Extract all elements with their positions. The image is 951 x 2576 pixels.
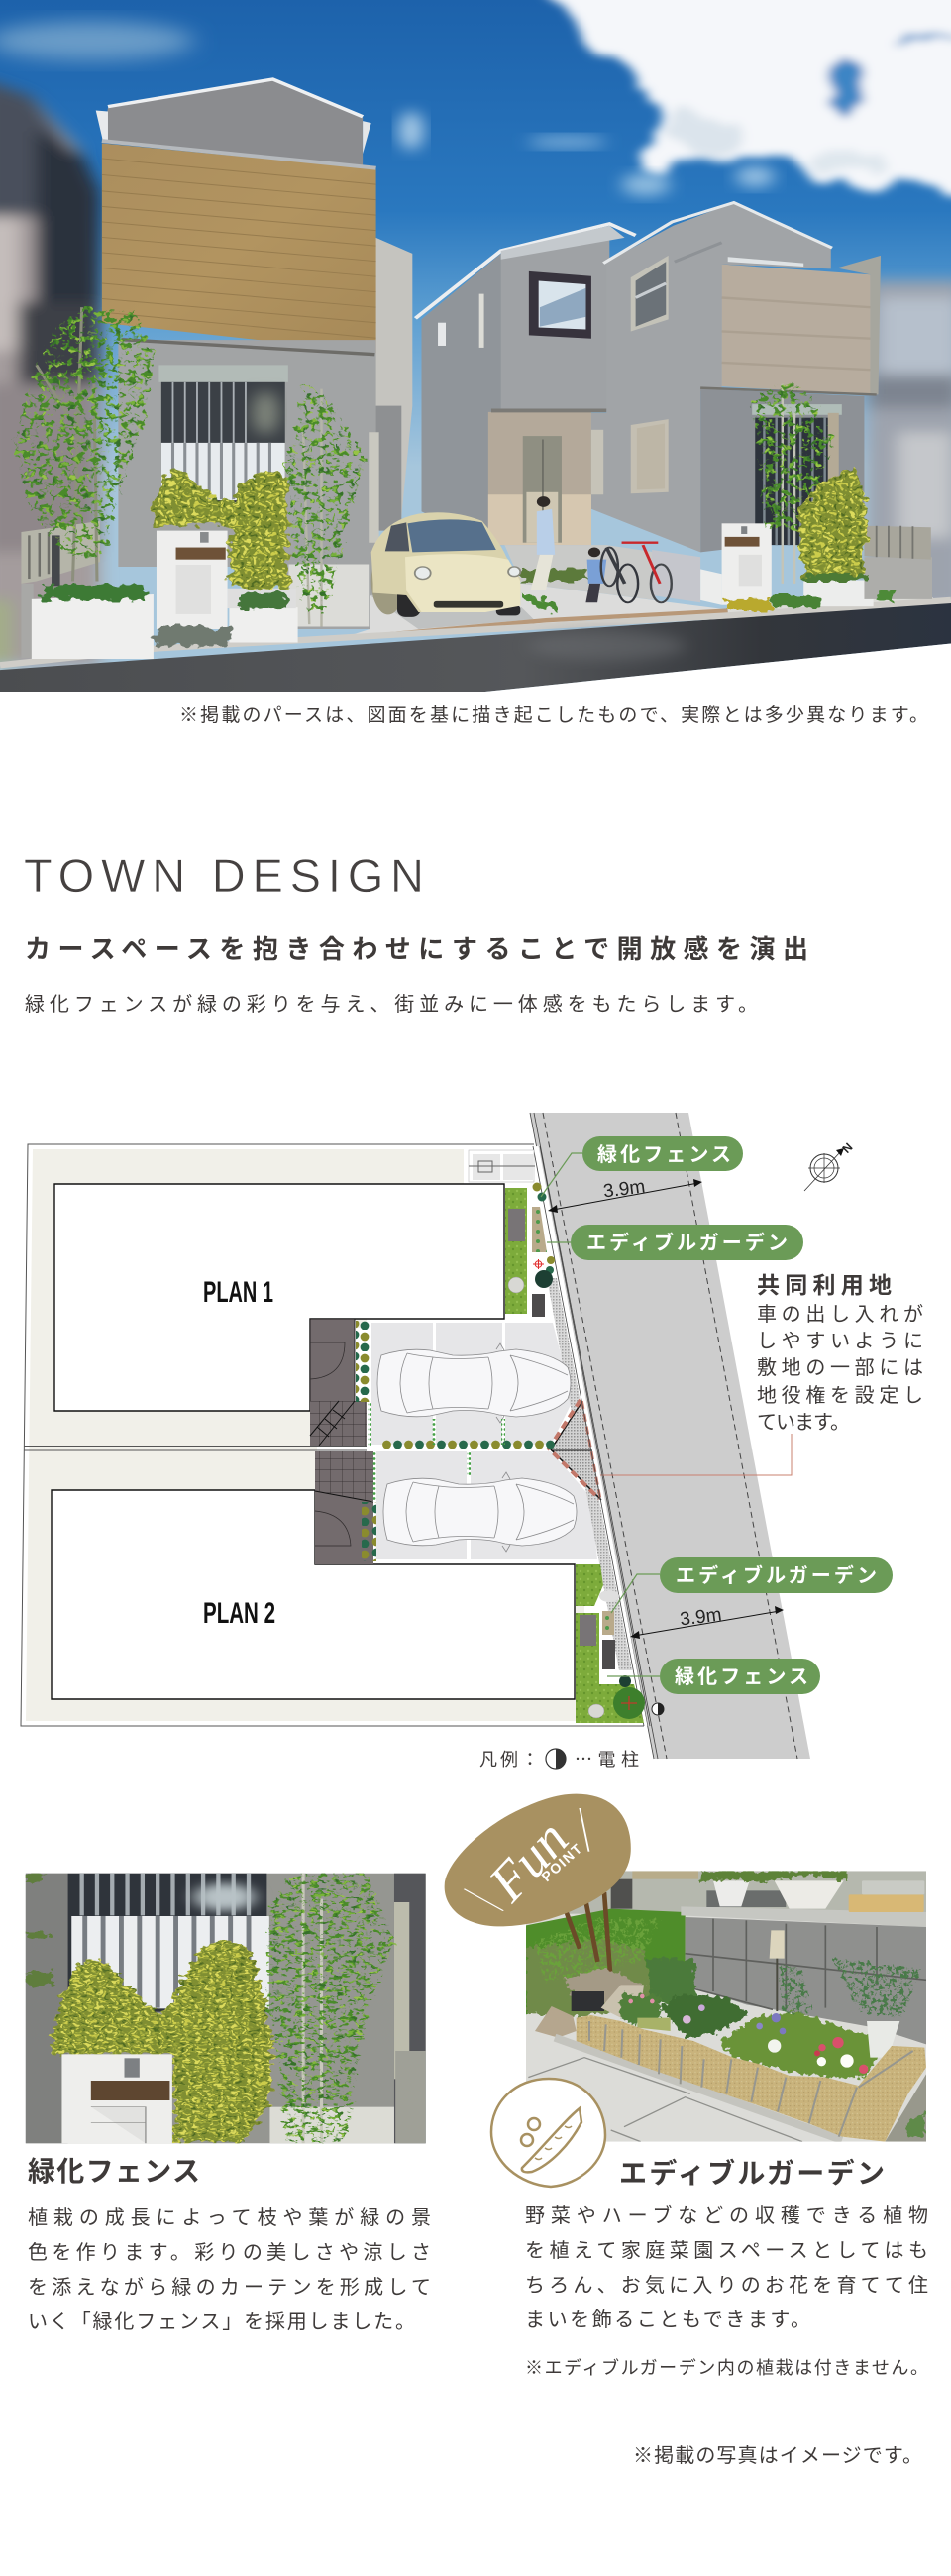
shared land note: ています。 xyxy=(757,1412,850,1434)
shared land note xyxy=(757,1272,923,1434)
leader lines xyxy=(541,1153,660,1676)
parking panels xyxy=(371,1323,597,1559)
right house xyxy=(415,203,881,602)
sub heading: 緑化フェンスが緑の彩りを与え、街並みに一体感をもたらします。 xyxy=(25,993,758,1016)
road xyxy=(530,1113,810,1759)
Fun POINT lettering: Fun xyxy=(476,1809,580,1913)
site plan xyxy=(21,1113,923,1770)
heading: edible garden: エディブルガーデン xyxy=(619,2157,885,2189)
icon: pea pod xyxy=(491,2079,605,2187)
clouds xyxy=(0,0,951,206)
Fun POINT lettering: POINT xyxy=(538,1840,585,1884)
sky xyxy=(0,0,951,753)
shared land note: 共同利用地 xyxy=(757,1272,892,1298)
text block: edible garden: を植えて家庭菜園スペースとしてはも xyxy=(525,2239,928,2262)
title: TOWN DESIGN: TOWN DESIGN xyxy=(24,849,424,902)
utility pole marker xyxy=(652,1703,664,1715)
shared land note: 車の出し入れが xyxy=(757,1303,923,1326)
PLAN 1 footprint: PLAN 1 xyxy=(203,1276,273,1309)
bicycle parking xyxy=(469,1150,535,1182)
text block: edible garden: 野菜やハーブなどの収穫できる植物 xyxy=(525,2203,928,2227)
entrance plan 1 xyxy=(310,1319,371,1446)
text block: green fence: 植栽の成長によって枝や葉が緑の景 xyxy=(28,2206,431,2229)
pill: edible garden upper: エディブルガーデン xyxy=(586,1231,788,1254)
lot divider xyxy=(24,1447,367,1450)
shared land note: しやすいように xyxy=(757,1331,923,1352)
shared land note: 敷地の一部には xyxy=(757,1356,923,1379)
text block: edible garden xyxy=(525,2203,928,2331)
PLAN 1 footprint xyxy=(54,1184,504,1411)
road xyxy=(0,600,951,692)
dimension lower 3.9m xyxy=(630,1604,784,1639)
front fence, planters and gate posts xyxy=(21,521,932,659)
blurred neighbouring house left xyxy=(0,79,100,665)
legend: 凡例： xyxy=(479,1750,539,1770)
ground and driveway xyxy=(340,584,933,639)
entrance plan 2 xyxy=(315,1451,376,1564)
blurred neighbouring house right xyxy=(868,281,951,607)
compass: N xyxy=(840,1140,856,1156)
lot background xyxy=(26,1149,584,1721)
compass xyxy=(804,1140,856,1191)
photo: green fence xyxy=(26,1873,426,2144)
hero illustration: two houses xyxy=(0,0,951,692)
legend xyxy=(479,1749,639,1770)
paving strip and easement xyxy=(547,1278,792,1670)
PLAN 2 footprint: PLAN 2 xyxy=(203,1597,275,1630)
cream car xyxy=(371,512,520,617)
boundary white strip xyxy=(537,1146,646,1726)
plot outlines xyxy=(21,1144,644,1726)
green fence strips xyxy=(368,1401,555,1501)
legend: ⋯電柱 xyxy=(575,1750,639,1770)
Fun Point badge xyxy=(444,1793,631,1926)
text block: green fence: いく「緑化フェンス」を採用しました。 xyxy=(28,2310,415,2333)
PLAN 2 footprint xyxy=(52,1490,575,1699)
dimension lower 3.9m: 3.9m xyxy=(679,1604,723,1630)
caption under hero: ※掲載のパースは、図面を基に描き起こしたもので、実際とは多少異なります。 xyxy=(179,704,928,726)
pill: green fence upper: 緑化フェンス xyxy=(597,1143,731,1166)
pill: green fence lower: 緑化フェンス xyxy=(675,1665,808,1688)
pill: green fence lower xyxy=(660,1659,820,1694)
trees and shrubs xyxy=(12,307,895,646)
cut-away below road xyxy=(0,643,951,753)
shared land note: 地役権を設定し xyxy=(757,1384,923,1407)
dimension upper 3.9m xyxy=(548,1176,702,1213)
pill: edible garden lower xyxy=(660,1557,893,1593)
pill: edible garden upper xyxy=(571,1225,803,1260)
text block: green fence: を添えながら緑のカーテンを形成して xyxy=(28,2276,431,2299)
people and bicycles xyxy=(531,496,672,602)
note: edible garden: ※エディブルガーデン内の植栽は付きません。 xyxy=(525,2357,928,2378)
photo: edible garden xyxy=(526,1871,926,2142)
left house xyxy=(96,79,412,629)
heading: green fence: 緑化フェンス xyxy=(28,2156,200,2187)
lot hard surfaces xyxy=(367,1319,600,1564)
text block: edible garden: ちろん、お気に入りのお花を育てて住 xyxy=(525,2274,928,2297)
garden plan 1 xyxy=(505,1183,555,1317)
text block: green fence xyxy=(28,2206,431,2333)
text block: green fence: 色を作ります。彩りの美しさや涼しさ xyxy=(28,2241,431,2264)
pill: green fence upper xyxy=(582,1136,743,1171)
cars xyxy=(377,1343,577,1552)
note: photos: ※掲載の写真はイメージです。 xyxy=(633,2444,922,2467)
pill: edible garden lower: エディブルガーデン xyxy=(676,1563,877,1587)
heading: カースペースを抱き合わせにすることで開放感を演出 xyxy=(25,934,808,964)
dimension upper 3.9m: 3.9m xyxy=(602,1176,646,1202)
garden plan 2 xyxy=(576,1564,645,1723)
text block: edible garden: まいを飾ることもできます。 xyxy=(525,2308,810,2331)
